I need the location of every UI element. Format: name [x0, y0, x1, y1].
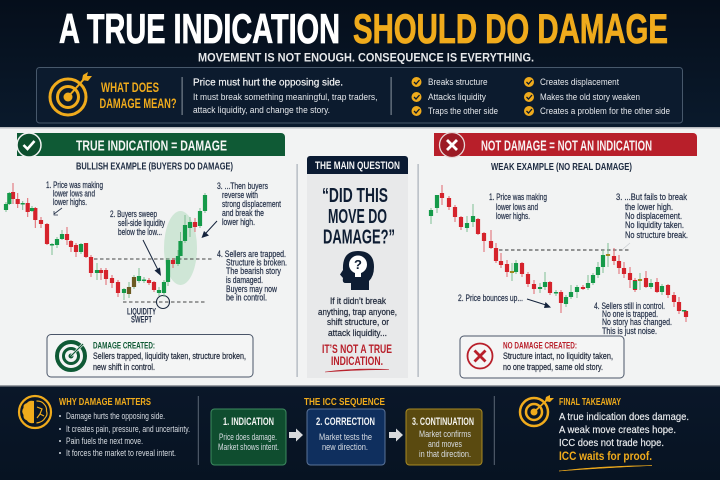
step 1: indication: Market shows intent. [218, 442, 279, 452]
big question [322, 184, 395, 248]
annotation 4: 4. Sellers are trapped. [217, 249, 286, 259]
bullet list: It creates pain, pressure, and uncertainty. [66, 424, 190, 434]
checklist: Breaks structure [428, 77, 488, 87]
annotation 3: lower high. [222, 217, 255, 227]
panel: what does damage mean [36, 68, 682, 123]
conclusion: not a true indication: INDICATION. [331, 354, 383, 368]
conclusion: not a true indication [322, 342, 392, 372]
chart: bullish candlesticks [6, 183, 212, 308]
conclusion: not a true indication: IT’S NOT A TRUE [322, 342, 392, 356]
callout: no damage created: no one trapped, same old story. [503, 362, 603, 372]
step 1: indication: Price does damage. [219, 432, 277, 442]
takeaway text: ICC does not trade hope. [559, 437, 664, 449]
annotation 4: This is just noise. [602, 326, 657, 336]
bullet list: It forces the market to reveal intent. [66, 448, 176, 458]
annotation 1: lower highs. [53, 197, 87, 207]
bullet list [59, 411, 190, 458]
callout: damage created: Sellers trapped, liquidity taken, structure broken, [93, 351, 246, 361]
step 3: continuation: in that direction. [419, 449, 471, 459]
annotation 4: is damaged. [226, 275, 263, 285]
callout: no damage created [460, 336, 624, 378]
step 1: indication: 1. INDICATION [223, 416, 274, 428]
annotation 4 [594, 301, 672, 336]
panel: the icc sequence [211, 396, 482, 465]
big question: “DID THIS [322, 184, 388, 207]
annotation 3 [217, 181, 281, 227]
heading: what does damage mean [100, 79, 176, 111]
body text: attack liquidity... [328, 328, 387, 338]
icon: amber target [520, 395, 554, 426]
annotation 4: No story has changed. [602, 317, 672, 327]
heading: what does damage mean: WHAT DOES [101, 79, 159, 95]
checklist: Makes the old story weaken [540, 92, 640, 102]
annotation 3 [616, 192, 688, 240]
label: liquidity swept: SWEPT [131, 314, 152, 326]
panel: true indication [6, 133, 287, 377]
banner: true indication = damage [17, 133, 285, 157]
title [59, 5, 668, 52]
annotation 4: No one is trapped. [602, 309, 658, 319]
arrow: step 2 to 3 [389, 428, 403, 442]
subtitle: MOVEMENT IS NOT ENOUGH. CONSEQUENCE IS EVERYTHING. [198, 52, 534, 64]
banner: not damage = not an indication [434, 132, 697, 158]
icon: brain [19, 396, 51, 428]
checklist: Traps the other side [428, 106, 498, 116]
callout: no damage created: Structure intact, no liquidity taken, [503, 351, 613, 361]
subheading: bullish example: BULLISH EXAMPLE (BUYERS DO DAMAGE) [76, 160, 233, 172]
panel: the icc sequence: THE ICC SEQUENCE [304, 396, 385, 408]
annotation 1: lower lows and [496, 202, 538, 212]
annotation 4: be in control. [226, 292, 267, 302]
panel: final takeaway: FINAL TAKEAWAY [559, 396, 621, 408]
annotation 2: below the low... [118, 227, 162, 237]
arrow: step 1 to 2 [289, 428, 303, 442]
annotation 2: sell-side liquidity [118, 218, 165, 228]
step 1: indication [211, 409, 286, 465]
step 3: continuation: and moves [428, 439, 462, 449]
definition text [193, 76, 378, 115]
definition text: It must break something meaningful, trap traders, [193, 92, 378, 102]
icon: amber target [50, 72, 92, 115]
icon: head with question mark: ? [354, 257, 362, 272]
bullet list: Pain fuels the next move. [66, 436, 143, 446]
takeaway text: A true indication does damage. [559, 411, 689, 423]
bullet list: Damage hurts the opposing side. [66, 411, 165, 421]
annotation 3: No liquidity taken. [625, 220, 684, 230]
step 2: correction [307, 409, 385, 465]
annotation 1: lower highs. [496, 211, 530, 221]
annotation 4: The bearish story [226, 266, 281, 276]
arrow 3 [202, 221, 217, 238]
annotation 3: and break the [222, 208, 264, 218]
annotation 1: lower lows and [53, 188, 95, 198]
definition text: attack liquidity, and change the story. [193, 105, 330, 115]
icon: red x [468, 344, 492, 368]
annotation 3: No displacement. [625, 211, 682, 221]
arrow 1 [54, 208, 62, 215]
annotation 3: 3. ...But fails to break [616, 192, 688, 202]
annotation 4: 4. Sellers still in control. [594, 301, 665, 311]
definition text: Price must hurt the opposing side. [193, 76, 343, 88]
step 2: correction: new direction. [322, 442, 368, 452]
big question: MOVE DO [328, 205, 387, 228]
annotation 4: Buyers may now [226, 284, 278, 294]
body text: If it didn’t break [330, 296, 386, 306]
body text: anything, trap anyone, [318, 307, 397, 317]
heading: what does damage mean: DAMAGE MEAN? [100, 95, 176, 111]
checklist: Attacks liquidity [428, 92, 486, 102]
chart: weak candlesticks [431, 185, 686, 322]
big question: DAMAGE?” [323, 226, 395, 248]
arrow 2 [527, 299, 551, 308]
header: the main question [307, 156, 408, 174]
annotation 3: 3. ...Then buyers [217, 181, 268, 191]
checklist: Creates displacement [540, 77, 619, 87]
step 3: continuation: 3. CONTINUATION [412, 416, 474, 428]
callout: damage created: new shift in control. [93, 362, 155, 372]
subheading: weak example: WEAK EXAMPLE (NO REAL DAMAGE) [491, 161, 632, 173]
checklist: Creates a problem for the other side [540, 106, 670, 116]
checklist [412, 77, 670, 116]
annotation 2: 2. Buyers sweep [110, 209, 157, 219]
annotation 2: 2. Price bounces up... [458, 293, 523, 303]
annotation 4 [217, 249, 287, 302]
takeaway text [559, 411, 689, 471]
label: liquidity swept: LIQUIDITY [127, 306, 156, 318]
panel: final takeaway [520, 395, 689, 471]
panel: not damage [431, 132, 697, 378]
panel: why damage matters [19, 396, 190, 458]
annotation 3: strong displacement [222, 199, 281, 209]
annotation 3: the lower high. [625, 202, 673, 212]
annotation 1: 1. Price was making [46, 180, 103, 190]
step 2: correction: Market tests the [319, 432, 372, 442]
body text [318, 296, 397, 338]
banner: true indication = damage: TRUE INDICATION = DAMAGE [76, 138, 227, 154]
annotation 1 [46, 180, 103, 207]
takeaway text: A weak move creates hope. [559, 424, 676, 436]
annotation 4: Structure is broken. [226, 258, 287, 268]
callout: damage created [47, 334, 253, 377]
icon: head with question mark [340, 251, 374, 290]
annotation 1: 1. Price was making [489, 192, 547, 202]
annotation 2 [110, 209, 165, 237]
takeaway text: ICC waits for proof. [559, 451, 652, 463]
annotation 3: reverse with [222, 190, 258, 200]
step 3: continuation [406, 409, 482, 465]
panel: why damage matters: WHY DAMAGE MATTERS [59, 396, 151, 408]
header: the main question: THE MAIN QUESTION [315, 160, 400, 172]
title: A TRUE INDICATION [59, 5, 340, 52]
step 2: correction: 2. CORRECTION [316, 416, 375, 428]
callout: damage created: DAMAGE CREATED: [93, 340, 155, 352]
annotation 3: No structure break. [625, 230, 688, 240]
annotation 1 [489, 192, 547, 221]
icon: green target [57, 342, 85, 370]
body text: shift structure, or [327, 317, 389, 327]
panel: the main question [307, 156, 408, 378]
step 3: continuation: Market confirms [419, 429, 471, 439]
callout: no damage created: NO DAMAGE CREATED: [503, 340, 577, 352]
label: liquidity swept [127, 306, 156, 326]
arrow 2 [143, 240, 161, 276]
